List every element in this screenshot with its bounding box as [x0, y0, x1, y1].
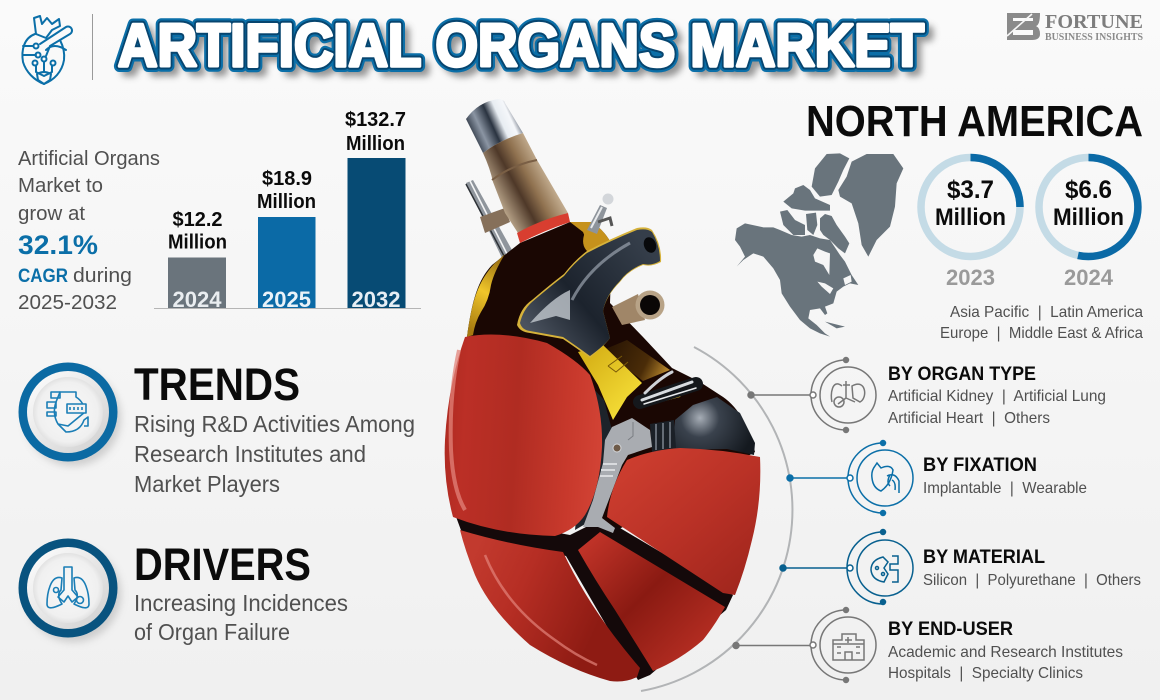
panel: drivers [18, 538, 348, 645]
title: ARTIFICIAL ORGANS MARKET [124, 18, 930, 85]
connector arc [641, 347, 792, 691]
small valve [583, 194, 614, 252]
text: trends description: Research Institutes and [134, 441, 366, 467]
chart: donut 2024: Million [1053, 204, 1124, 231]
icon: heart [787, 440, 913, 516]
icon: trends badge [18, 362, 121, 466]
brass tube [483, 133, 568, 233]
chart: donut 2023: 2023 [946, 265, 995, 290]
chart: donut 2023: Million [935, 204, 1006, 231]
text: other regions [940, 304, 1143, 342]
red panel: lower left [460, 530, 640, 682]
icon: kidney circuit [780, 530, 913, 604]
bar chart: market size [154, 109, 421, 312]
Hudson Bay and lakes [813, 248, 852, 294]
icon: circuit heart logo [22, 16, 72, 84]
text: fixation types: Implantable | Wearable [923, 480, 1087, 497]
grille [650, 420, 676, 452]
black dome [673, 397, 755, 455]
text: trends description [134, 411, 415, 497]
panel: trends [18, 359, 415, 497]
bar 2025: $18.9 [262, 168, 312, 190]
text: CAGR statement: during [73, 265, 132, 287]
text: end-user types [888, 644, 1123, 682]
bar 2024: Million [168, 232, 227, 254]
bar 2024: 2024 [172, 287, 222, 312]
heading: drivers: DRIVERS [134, 539, 311, 590]
dark joint backing [455, 514, 733, 680]
red panel: right [607, 448, 760, 595]
logo: Fortune Business Insights [1007, 11, 1143, 43]
bar 2032: 2032 [352, 287, 400, 312]
heading: by organ type: BY ORGAN TYPE [888, 364, 1036, 385]
logo: Fortune Business Insights: FORTUNE [1045, 11, 1143, 33]
silver bracket [583, 418, 652, 533]
icon: lungs [748, 358, 876, 432]
segment: by material [780, 530, 1141, 604]
heading: trends: TRENDS [134, 359, 300, 410]
text: trends description: Rising R&D Activities Among [134, 411, 415, 437]
text: drivers description [134, 590, 348, 645]
brass pipe [612, 290, 664, 325]
title: ARTIFICIAL ORGANS MARKET [118, 12, 924, 79]
logo: Fortune Business Insights: BUSINESS INSIGHTS [1045, 32, 1143, 43]
chart: donut 2024: 2024 [1064, 265, 1114, 290]
icon: drivers badge [18, 538, 121, 642]
heading: by end-user: BY END-USER [888, 619, 1013, 640]
map: North America [735, 153, 903, 337]
segment: by organ type [748, 358, 1106, 432]
dark channel beside panel [575, 385, 612, 530]
red panel: lower middle [578, 532, 725, 671]
text: drivers description: Increasing Incidences [134, 590, 348, 616]
bar 2025: Million [257, 191, 316, 213]
segment: by fixation [787, 440, 1087, 516]
text: CAGR statement: CAGR [18, 266, 68, 287]
text: CAGR statement: 32.1% [18, 230, 98, 260]
dark heart body [460, 222, 755, 540]
text: organ types: Artificial Heart | Others [888, 410, 1050, 427]
text: organ types [888, 388, 1106, 427]
black aorta arch [517, 227, 661, 358]
text: organ types: Artificial Kidney | Artificial Lung [888, 388, 1106, 405]
bar 2024 [168, 209, 227, 312]
chart: donut 2023 [921, 158, 1020, 290]
chart: donut 2024: $6.6 [1065, 176, 1112, 204]
text: material types: Silicon | Polyurethane | Others [923, 572, 1141, 589]
title: ARTIFICIAL ORGANS MARKET [118, 12, 924, 79]
text: CAGR statement [18, 148, 160, 314]
text: end-user types: Hospitals | Specialty Clinics [888, 665, 1083, 682]
segment: by end-user [733, 608, 1123, 682]
bar 2025: 2025 [262, 287, 311, 312]
bar 2032: $132.7 [345, 109, 406, 131]
text: CAGR statement: Market to [18, 175, 103, 197]
chart: donut 2023: $3.7 [947, 176, 994, 204]
text: trends description: Market Players [134, 471, 280, 497]
divider [92, 14, 93, 80]
illustration: artificial heart [445, 99, 760, 682]
text: end-user types: Academic and Research Institutes [888, 644, 1123, 661]
red ring [517, 213, 570, 243]
bronze surface [603, 340, 670, 381]
heading: by material: BY MATERIAL [923, 547, 1045, 568]
yellow wedge [640, 385, 690, 405]
text: CAGR statement: 2025-2032 [18, 292, 117, 314]
bar 2032: Million [346, 133, 405, 155]
text: CAGR statement: Artificial Organs [18, 148, 160, 170]
text: CAGR statement: grow at [18, 203, 85, 225]
title: ARTIFICIAL ORGANS MARKET [118, 12, 924, 79]
icon: hospital [733, 608, 876, 682]
side rod [466, 180, 512, 258]
gold highlight [467, 254, 505, 337]
yellow surface [578, 345, 642, 420]
silver cap cylinder [466, 99, 523, 153]
gold rim [570, 222, 612, 255]
bar 2032 [345, 109, 406, 312]
chart: donut 2024 [1039, 158, 1138, 290]
text: drivers description: of Organ Failure [134, 619, 290, 645]
red panel: upper left [445, 335, 602, 536]
text: other regions: Asia Pacific | Latin America [950, 304, 1143, 321]
heading: by fixation: BY FIXATION [923, 455, 1037, 476]
bar 2024: $12.2 [172, 209, 222, 231]
text: other regions: Europe | Middle East & Africa [940, 325, 1143, 342]
chrome fittings [640, 372, 696, 404]
bar 2025 [257, 168, 316, 312]
